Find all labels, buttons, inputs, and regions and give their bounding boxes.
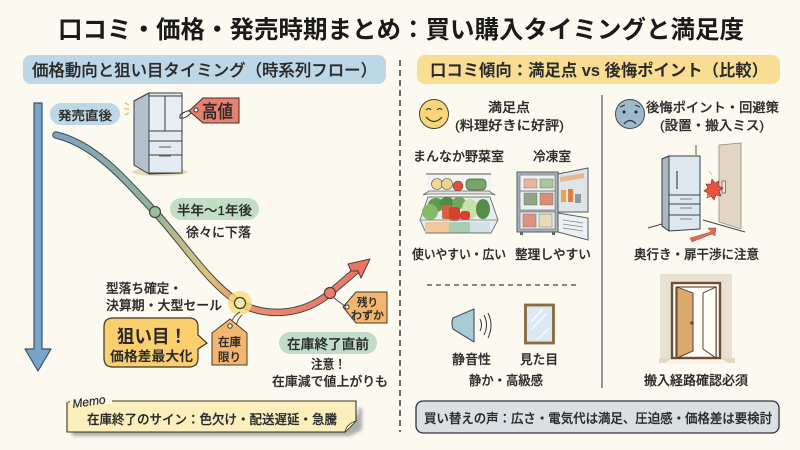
icon: fridge against door <box>648 143 745 242</box>
text: model change timing: 型落ち確定・ <box>106 281 182 296</box>
memo note <box>67 392 362 436</box>
heading: reviews <box>417 55 780 84</box>
text: easy and roomy: 使いやすい・広い <box>412 247 506 262</box>
text: depth and door clearance: 奥行き・扉干渉に注意 <box>634 247 759 262</box>
text: satisfaction heading <box>455 100 564 133</box>
icon: sad face <box>616 100 644 128</box>
text: regret heading: (設置・搬入ミス) <box>660 118 764 133</box>
label: half year to one year <box>170 198 259 220</box>
heading: price trend <box>23 55 386 84</box>
heading: reviews: 口コミ傾向：満足点 vs 後悔ポイント（比較） <box>430 61 768 80</box>
note: replacement voices: 買い替えの声：広さ・電気代は満足、圧迫感・価格差は要検討 <box>424 411 772 426</box>
icon: mirror <box>526 305 554 343</box>
label: appearance: 見た目 <box>520 352 558 367</box>
node: stock end <box>324 288 336 298</box>
heading: price trend: 価格動向と狙い目タイミング（時系列フロー） <box>32 62 377 80</box>
tag: high price <box>180 98 239 123</box>
icon: speaker <box>452 309 491 342</box>
label: vegetable compartment: まんなか野菜室 <box>413 149 504 164</box>
label: just before stock ends <box>279 332 377 354</box>
tag: high price: 高値 <box>202 102 233 122</box>
callout: target <box>104 318 207 367</box>
callout: target: 狙い目！ <box>117 326 187 347</box>
text: satisfaction heading: 満足点 <box>488 100 530 115</box>
icon: refrigerator <box>124 93 188 176</box>
tag: little left: 残り <box>357 295 378 309</box>
label: freezer: 冷凍室 <box>533 149 571 164</box>
tag: limited stock <box>212 312 247 365</box>
text: price rise warning: 在庫減で値上がりも <box>272 374 388 389</box>
label: half year to one year: 半年〜1年後 <box>177 203 252 218</box>
callout: target: 価格差最大化 <box>110 348 194 364</box>
tag: limited stock: 限り <box>218 351 241 364</box>
label: just after release: 発売直後 <box>58 108 113 123</box>
icon: freezer <box>517 168 588 240</box>
title: 口コミ・価格・発売時期まとめ：買い購入タイミングと満足度 <box>58 15 744 44</box>
node: half year <box>150 206 160 218</box>
label: quietness: 静音性 <box>452 352 491 367</box>
icon: vegetable drawer <box>420 174 498 233</box>
icon: open doorway <box>659 274 735 364</box>
text: delivery route check: 搬入経路確認必須 <box>644 373 748 388</box>
text: easy to organize: 整理しやすい <box>515 247 591 262</box>
arrow: time axis <box>25 103 51 371</box>
node: target timing <box>228 291 252 315</box>
memo note: Memo <box>71 392 107 411</box>
memo note: 在庫終了のサイン：色欠け・配送遅延・急騰 <box>87 412 337 427</box>
chart: price curve <box>56 135 370 315</box>
text: regret heading: 後悔ポイント・回避策 <box>646 100 779 115</box>
tag: limited stock: 在庫 <box>218 335 241 349</box>
divider between comparison columns <box>601 95 603 388</box>
icon: smile <box>420 100 448 128</box>
label: just after release <box>50 103 120 125</box>
tag: little left: わずか <box>351 309 384 322</box>
arrow head: rising price <box>348 259 370 278</box>
tag: little left <box>334 292 387 323</box>
text: price rise warning <box>272 357 388 389</box>
text: model change timing: 決算期・大型セール <box>106 297 222 313</box>
text: model change timing <box>106 281 222 313</box>
text: regret heading <box>646 100 779 133</box>
note: replacement voices <box>416 401 779 433</box>
text: gradual decline: 徐々に下落 <box>186 225 251 240</box>
label: just before stock ends: 在庫終了直前 <box>287 336 369 352</box>
text: satisfaction heading: (料理好きに好評) <box>455 118 564 133</box>
text: quiet and premium: 静か・高級感 <box>469 373 543 388</box>
text: price rise warning: 注意！ <box>311 357 346 372</box>
